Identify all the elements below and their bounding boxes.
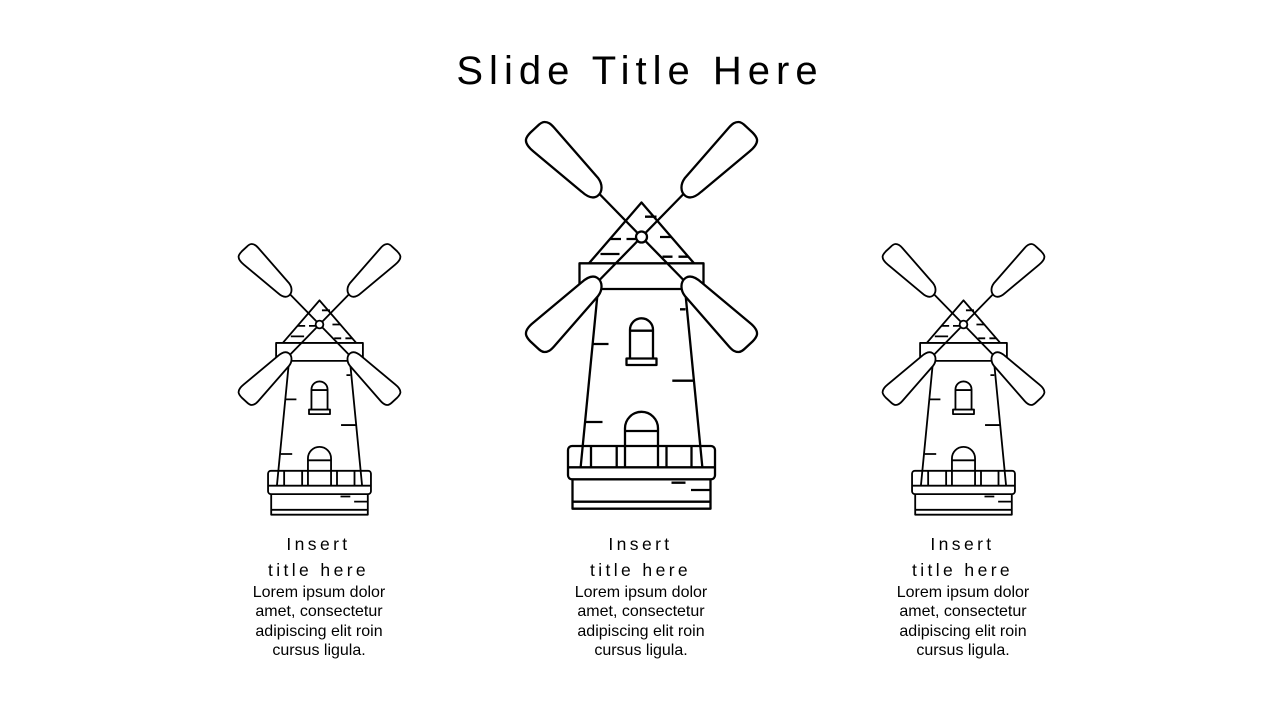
heading: left column xyxy=(268,534,369,580)
icon: centre windmill xyxy=(526,122,757,509)
icon: right windmill xyxy=(883,244,1044,515)
text block: left column: amet, consectetur xyxy=(255,603,383,620)
text block: right column: Lorem ipsum dolor xyxy=(897,584,1029,601)
text block: left column: Lorem ipsum dolor xyxy=(253,584,385,601)
text block: right column: cursus ligula. xyxy=(916,642,1010,659)
icon: left windmill xyxy=(239,244,400,515)
text block: left column: adipiscing elit roin xyxy=(255,623,383,640)
text block: centre column: amet, consectetur xyxy=(577,603,705,620)
text block: centre column xyxy=(575,584,707,659)
text block: right column: amet, consectetur xyxy=(899,603,1027,620)
text block: left column: cursus ligula. xyxy=(272,642,366,659)
text block: centre column: Lorem ipsum dolor xyxy=(575,584,707,601)
text block: right column xyxy=(897,584,1029,659)
heading: centre column: title here xyxy=(590,560,691,580)
heading: centre column xyxy=(590,534,691,580)
heading: right column xyxy=(912,534,1013,580)
text block: left column xyxy=(253,584,385,659)
text block: centre column: cursus ligula. xyxy=(594,642,688,659)
text block: centre column: adipiscing elit roin xyxy=(577,623,705,640)
heading: left column: title here xyxy=(268,560,369,580)
heading: right column: title here xyxy=(912,560,1013,580)
heading: right column: Insert xyxy=(930,534,995,554)
text block: right column: adipiscing elit roin xyxy=(899,623,1027,640)
heading: left column: Insert xyxy=(286,534,351,554)
heading: centre column: Insert xyxy=(608,534,673,554)
title: Slide Title Here xyxy=(456,49,824,93)
